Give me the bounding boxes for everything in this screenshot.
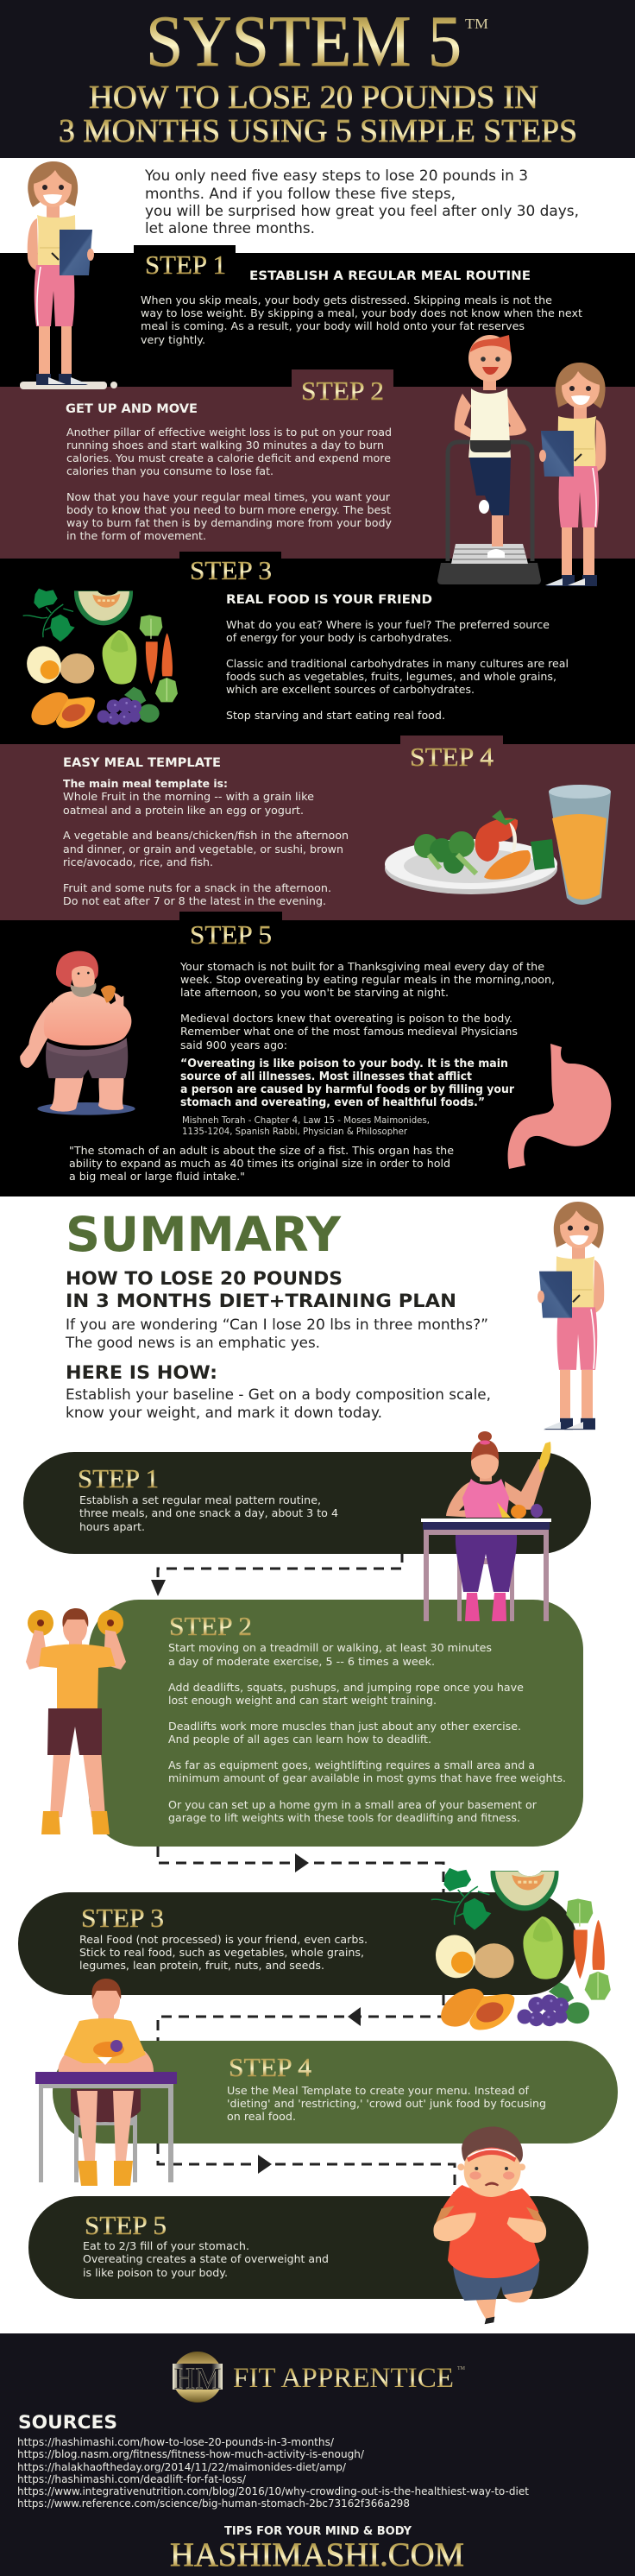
step 4 body text: Fruit and some nuts for a snack in the afternoon.	[63, 881, 331, 894]
panel: step 1	[0, 245, 635, 388]
summary step 2 text: a day of moderate exercise, 5 -- 6 times a week.	[168, 1655, 435, 1668]
quote attribution: 1135-1204, Spanish Rabbi, Physician & Philosopher	[182, 1126, 407, 1137]
stomach fact text: "The stomach of an adult is about the size of a fist. This organ has the	[69, 1144, 454, 1157]
step 3 body text: foods such as vegetables, fruits, legumes, and whole grains,	[226, 670, 556, 683]
step 2 body text: way to burn fat then is by demanding more from your body	[66, 516, 393, 529]
step 1 label: STEP 1	[145, 249, 226, 280]
summary step 1 text: Establish a set regular meal pattern routine,	[79, 1493, 321, 1506]
summary step 3 text	[79, 1933, 368, 1972]
summary step 2 text: And people of all ages can learn how to deadlift.	[168, 1733, 431, 1746]
illustration: woman with clipboard	[20, 161, 117, 389]
summary step 1 text: three meals, and one snack a day, about 3 to 4	[79, 1506, 338, 1519]
quote: “Overeating is like poison to your body. It is the main	[180, 1058, 508, 1070]
logo: HM emblem: HM	[173, 2361, 222, 2396]
arrow: step 1 to step 2	[151, 1552, 402, 1596]
summary step 2 text: Deadlifts work more muscles than just about any other exercise.	[168, 1720, 521, 1733]
step 1 body text: When you skip meals, your body gets distressed. Skipping meals is not the	[141, 294, 552, 306]
step 3 heading: REAL FOOD IS YOUR FRIEND	[226, 593, 432, 607]
logo: wordmark: TM	[457, 2366, 466, 2371]
step 5 body text: late afternoon, so you won't be starving at night.	[180, 986, 449, 999]
panel: summary step 1	[23, 1452, 591, 1554]
step 3 body text: of energy for your body is carbohydrates.	[226, 631, 452, 644]
summary step 2 text: Or you can set up a home gym in a small area of your basement or	[168, 1798, 538, 1811]
quote: a person are caused by harmful foods or by filling your	[180, 1083, 515, 1096]
panel: summary step 5	[28, 2196, 588, 2299]
panel: summary step 3	[18, 1892, 577, 1995]
tagline: TIPS FOR YOUR MIND & BODY	[224, 2525, 412, 2538]
panel: step 5	[0, 912, 635, 1196]
summary subheading: IN 3 MONTHS DIET+TRAINING PLAN	[66, 1291, 456, 1311]
panel: step 2	[0, 369, 635, 559]
summary subheading: HOW TO LOSE 20 POUNDS	[66, 1268, 343, 1289]
summary step 5 label: STEP 5	[85, 2210, 167, 2240]
illustration: woman at table with fruit	[421, 1431, 551, 1621]
panel: header	[0, 0, 635, 158]
sources heading: SOURCES	[18, 2412, 117, 2433]
step 2 label: STEP 2	[301, 376, 384, 406]
step 3 label: STEP 3	[190, 555, 272, 585]
baseline text: Establish your baseline - Get on a body composition scale,	[66, 1386, 491, 1404]
panel: footer	[0, 2333, 635, 2576]
baseline text: know your weight, and mark it down today.	[66, 1405, 382, 1422]
step 4 body text: Whole Fruit in the morning -- with a grain like	[63, 790, 314, 803]
summary question text	[65, 1316, 488, 1352]
sources list: https://hashimashi.com/how-to-lose-20-pounds-in-3-months/	[17, 2435, 335, 2448]
summary step 4 text: 'dieting' and 'restricting,' 'crowd out' junk food by focusing	[227, 2097, 546, 2110]
step 4 body text: rice/avocado, rice, and fish.	[63, 856, 213, 868]
panel: summary intro	[65, 1202, 604, 1430]
arrow: step 3 to step 4	[158, 1995, 443, 2042]
summary step 4 text: on real food.	[227, 2110, 296, 2123]
here is how heading: HERE IS HOW:	[66, 1362, 217, 1383]
intro text	[144, 167, 579, 237]
illustration: woman with clipboard	[538, 1202, 604, 1430]
step 1 body text: meal is coming. As a result, your body will hold onto your fat reserves	[141, 319, 525, 332]
summary question text: The good news is an emphatic yes.	[65, 1335, 320, 1352]
intro text: months. And if you follow these five steps,	[145, 186, 456, 203]
intro text: You only need five easy steps to lose 20 pounds in 3	[144, 167, 528, 185]
sources list: https://hashimashi.com/deadlift-for-fat-loss/	[17, 2472, 247, 2485]
step 5 body text: Medieval doctors knew that overeating is poison to the body.	[180, 1012, 512, 1025]
step 3 body text: which are excellent sources of carbohydrates.	[226, 683, 475, 696]
illustration: vegetables and fruit	[431, 1868, 611, 2030]
website: HASHIMASHI.COM	[170, 2536, 464, 2573]
summary step 1 text: hours apart.	[79, 1520, 145, 1533]
summary subheading	[66, 1268, 456, 1311]
quote: source of all illnesses. Most illnesses that afflict	[180, 1070, 472, 1083]
summary step 5 text: Overeating creates a state of overweight and	[83, 2252, 329, 2265]
step 2 body text: calories. You must create a calorie deficit and expend more	[66, 451, 391, 464]
logo: wordmark: FIT APPRENTICE	[233, 2363, 454, 2394]
step 2 body text: calories than you consume to lose fat.	[66, 464, 273, 477]
quote	[180, 1058, 515, 1109]
step 4 body text: A vegetable and beans/chicken/fish in the afternoon	[63, 829, 349, 842]
summary step 2 text: garage to lift weights with these tools for deadlifting and fitness.	[168, 1811, 520, 1824]
step 4 body text	[63, 777, 349, 907]
step 2 body text: in the form of movement.	[66, 529, 206, 542]
sources list: https://halakhaoftheday.org/2014/11/22/maimonides-diet/amp/	[17, 2460, 347, 2473]
summary step 3 text: legumes, lean protein, fruit, nuts, and seeds.	[79, 1959, 324, 1972]
step 2 body text: Another pillar of effective weight loss is to put on your road	[66, 426, 392, 439]
summary step 2 text: lost enough weight and can start weight training.	[168, 1694, 437, 1707]
sources list: https://blog.nasm.org/fitness/fitness-how-much-activity-is-enough/	[17, 2447, 365, 2460]
quote: stomach and overeating, even of healthful foods.”	[180, 1096, 485, 1109]
summary step 2 text	[168, 1641, 566, 1824]
summary step 1 text	[79, 1493, 338, 1533]
step 5 label: STEP 5	[190, 919, 272, 950]
illustration: trainer woman with clipboard	[539, 363, 606, 586]
quote attribution	[182, 1114, 430, 1137]
step 3 body text: Stop starving and start eating real food.	[226, 709, 445, 722]
step 1 body text	[141, 294, 582, 346]
illustration: overweight man eating	[20, 951, 135, 1115]
quote attribution: Mishneh Torah - Chapter 4, Law 15 - Moses Maimonides,	[182, 1114, 430, 1126]
panel: step 4	[0, 736, 635, 920]
summary step 2 text: Start moving on a treadmill or walking, at least 30 minutes	[168, 1641, 492, 1654]
step 2 body text: body to know that you need to burn more energy. The best	[66, 503, 391, 516]
subtitle	[59, 79, 577, 149]
summary step 5 text: is like poison to your body.	[83, 2266, 228, 2279]
panel: summary step 2	[89, 1600, 583, 1847]
title: SYSTEM 5	[146, 1, 462, 82]
illustration: plate of vegetables and juice	[385, 785, 611, 905]
step 3 body text	[226, 618, 569, 722]
summary step 2 text: As far as equipment goes, weightlifting requires a small area and a	[168, 1758, 535, 1771]
summary step 3 label: STEP 3	[81, 1903, 164, 1933]
summary step 2 text: minimum amount of gear available in most gyms that have free weights.	[168, 1771, 566, 1784]
stomach fact text	[69, 1144, 454, 1183]
panel: summary step 4	[53, 2041, 618, 2144]
sources list: https://www.integrativenutrition.com/blog/2016/10/why-crowding-out-is-the-healthiest-way-to-diet	[17, 2484, 529, 2497]
step 1 body text: very tightly.	[141, 333, 205, 346]
step 5 body text: said 900 years ago:	[180, 1039, 287, 1051]
sources list	[17, 2435, 529, 2510]
baseline text	[66, 1386, 491, 1422]
step 2 body text	[66, 426, 393, 542]
summary step 3 text: Real Food (not processed) is your friend, even carbs.	[79, 1933, 368, 1946]
step 1 body text: way to lose weight. By skipping a meal, your body does not know when the next	[141, 306, 582, 319]
summary heading: SUMMARY	[66, 1207, 342, 1262]
logo: HM emblem	[173, 2352, 223, 2402]
illustration: man on treadmill	[437, 335, 541, 584]
summary step 5 text	[83, 2239, 329, 2279]
step 1 heading: ESTABLISH A REGULAR MEAL ROUTINE	[249, 269, 531, 283]
step 3 body text: Classic and traditional carbohydrates in many cultures are real	[226, 657, 569, 670]
summary question text: If you are wondering “Can I lose 20 lbs in three months?”	[66, 1316, 488, 1334]
sources list: https://www.reference.com/science/big-human-stomach-2bc73162f366a298	[17, 2497, 410, 2510]
step 3 body text: What do you eat? Where is your fuel? The preferred source	[226, 618, 550, 631]
step 5 body text	[179, 960, 555, 1051]
step 4 body text: Do not eat after 7 or 8 the latest in the evening.	[63, 894, 326, 907]
step 4 body text: The main meal template is:	[63, 777, 228, 790]
illustration: vegetables and fruit	[22, 589, 178, 728]
summary step 3 text: Stick to real food, such as vegetables, whole grains,	[79, 1946, 364, 1959]
step 4 body text: oatmeal and a protein like an egg or yogurt.	[63, 804, 304, 817]
step 2 heading: GET UP AND MOVE	[66, 402, 198, 416]
step 4 heading: EASY MEAL TEMPLATE	[63, 756, 221, 770]
summary step 2 text: Add deadlifts, squats, pushups, and jumping rope once you have	[168, 1681, 524, 1694]
illustration: man lifting dumbbells	[26, 1608, 126, 1834]
illustration: man at table with fruit	[35, 1979, 177, 2186]
summary step 4 label: STEP 4	[229, 2052, 312, 2082]
summary step 2 label: STEP 2	[169, 1611, 252, 1641]
title: TM	[465, 16, 488, 32]
step 5 body text: Your stomach is not built for a Thanksgiving meal every day of the	[179, 960, 544, 973]
illustration: stomach	[508, 1044, 611, 1169]
step 4 label: STEP 4	[410, 742, 494, 772]
summary step 1 label: STEP 1	[78, 1463, 159, 1493]
intro text: you will be surprised how great you feel after only 30 days,	[145, 203, 579, 220]
step 2 body text: Now that you have your regular meal times, you want your	[66, 490, 391, 503]
panel: step 3	[0, 552, 635, 745]
subtitle: HOW TO LOSE 20 POUNDS IN	[89, 79, 538, 116]
summary step 4 text	[227, 2084, 546, 2123]
step 4 body text: and dinner, or grain and vegetable, or sushi, brown	[63, 843, 343, 856]
step 5 body text: week. Stop overeating by eating regular meals in the morning,noon,	[180, 973, 555, 986]
summary step 4 text: Use the Meal Template to create your menu. Instead of	[227, 2084, 530, 2097]
stomach fact text: a big meal or large fluid intake."	[69, 1170, 245, 1183]
step 5 body text: Remember what one of the most famous medieval Physicians	[180, 1025, 518, 1038]
intro text: let alone three months.	[145, 220, 315, 237]
illustration: overweight runner	[433, 2126, 546, 2324]
arrow: step 4 to step 5	[158, 2144, 455, 2198]
arrow: step 2 to step 3	[158, 1847, 443, 1894]
summary step 5 text: Eat to 2/3 fill of your stomach.	[83, 2239, 249, 2252]
step 2 body text: running shoes and start walking 30 minutes a day to burn	[66, 439, 384, 451]
subtitle: 3 MONTHS USING 5 SIMPLE STEPS	[59, 113, 577, 149]
stomach fact text: ability to expand as much as 40 times its original size in order to hold	[69, 1157, 450, 1170]
